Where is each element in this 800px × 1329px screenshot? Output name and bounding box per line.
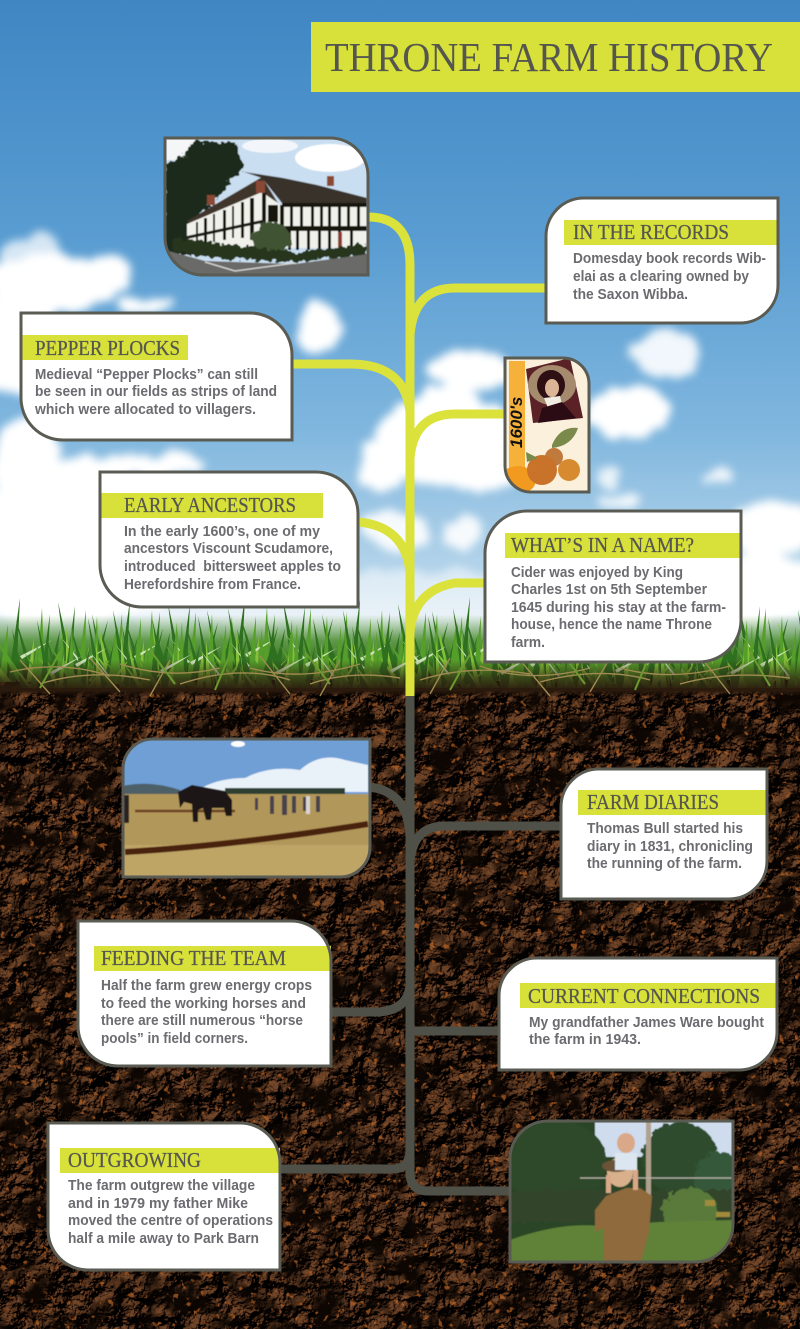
panel: what's in a name: farm. [511,635,545,651]
panel: current connections: CURRENT CONNECTIONS [528,984,760,1008]
photo: timber framed farmhouse [165,138,368,275]
panel: in the records: Domesday book records Wib- [573,251,766,267]
panel: farm diaries: diary in 1831, chronicling [587,839,753,855]
panel: what's in a name: WHAT’S IN A NAME? [511,533,694,557]
panel: current connections: My grandfather James Ware bought [529,1015,764,1031]
panel: outgrowing: half a mile away to Park Barn [68,1231,259,1247]
panel: what's in a name: Cider was enjoyed by King [511,565,683,581]
panel: in the records: elai as a clearing owned by [573,269,749,285]
panel: feeding the team [78,921,331,1066]
panel: farm diaries: FARM DIARIES [587,790,719,814]
panel: early ancestors: EARLY ANCESTORS [124,493,296,517]
panel: feeding the team: there are still numerous “horse [101,1013,303,1029]
panel: pepper plocks: Medieval “Pepper Plocks” can still [35,367,258,383]
panel: feeding the team: FEEDING THE TEAM [101,946,286,970]
panel: what's in a name: 1645 during his stay at the farm- [511,600,726,616]
panel: what's in a name [485,511,741,662]
panel: early ancestors: In the early 1600’s, one of my [124,524,320,540]
panel: current connections: the farm in 1943. [529,1032,641,1048]
panel: pepper plocks [21,313,292,440]
panel: early ancestors: Herefordshire from France. [124,577,301,593]
panel: early ancestors: introduced bittersweet apples to [124,559,341,575]
panel: in the records [546,198,778,323]
panel: early ancestors: ancestors Viscount Scudamore, [124,541,333,557]
panel: what's in a name: house, hence the name Throne [511,617,712,633]
panel: outgrowing: The farm outgrew the village [68,1178,255,1194]
panel: feeding the team: Half the farm grew energy crops [101,978,312,994]
panel: farm diaries [561,769,767,899]
panel: farm diaries: the running of the farm. [587,856,742,872]
panel: feeding the team: pools” in field corners. [101,1031,248,1047]
background: sky [0,0,800,690]
timeline trunk and branches: soil section [280,696,561,1191]
timeline trunk and branches: sky section [292,217,546,696]
panel: outgrowing [48,1123,280,1270]
background: grass [0,596,800,698]
panel: pepper plocks: which were allocated to villagers. [34,402,256,418]
title [311,22,800,92]
panel: in the records: IN THE RECORDS [573,220,729,244]
panel: pepper plocks: be seen in our fields as strips of land [35,384,277,400]
panel: outgrowing: and in 1979 my father Mike [68,1196,248,1212]
panel: feeding the team: to feed the working horses and [101,996,306,1012]
photo: father with child on shoulders [503,1120,746,1262]
title: THRONE FARM HISTORY [325,34,773,80]
panel: outgrowing: moved the centre of operations [68,1213,273,1229]
panel: outgrowing: OUTGROWING [68,1148,201,1172]
background: clouds [0,234,800,630]
image: 1600's portrait and apples [500,358,589,494]
panel: pepper plocks: PEPPER PLOCKS [35,336,180,360]
panel: early ancestors [100,472,358,607]
photo: heavy horse ploughing match [123,739,370,877]
image: 1600's portrait and apples: 1600's [507,397,526,448]
panel: in the records: the Saxon Wibba. [573,287,688,303]
panel: current connections [499,958,777,1070]
panel: what's in a name: Charles 1st on 5th September [511,582,707,598]
panel: farm diaries: Thomas Bull started his [587,821,743,837]
background: soil [0,672,800,1329]
